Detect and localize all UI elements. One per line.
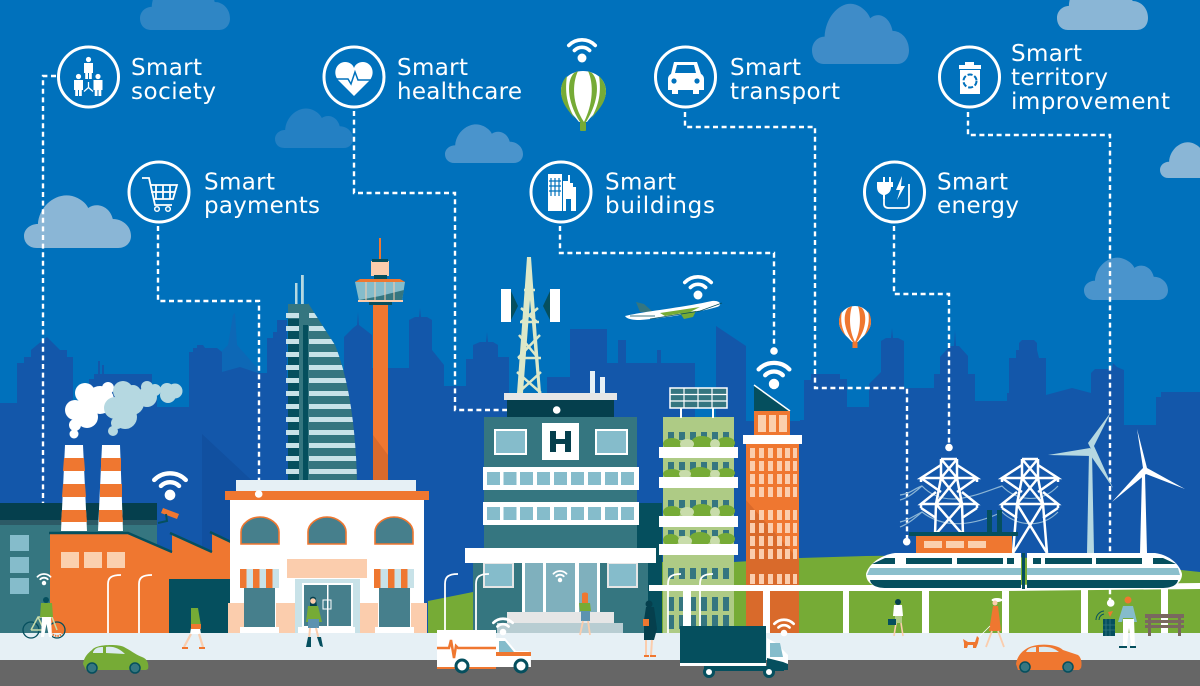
smart trash bin [1096,611,1115,636]
smart buildings item [531,162,715,222]
security camera [158,508,179,523]
panel: smart territory connector [968,112,1110,600]
panel: smart energy connector [894,226,953,451]
elevated rail viaduct [649,583,1200,633]
heading: smart energy: Smart [937,170,1008,196]
entrance [522,563,600,613]
person: bearded man [1118,596,1137,648]
icon: shopping cart [129,162,189,222]
heading: smart transport: transport [730,79,840,105]
panel: smart buildings connector [560,226,778,355]
window row 2 [483,502,639,525]
city skyline silhouette [0,308,1200,640]
delivery truck [680,626,788,676]
icon: recycling bin [940,47,1000,107]
heading: smart society: society [131,79,216,105]
icon: people network [58,47,118,107]
icon: car [656,47,716,107]
connector dots [255,406,1114,607]
faint distant building [213,313,259,392]
park bench [1145,614,1184,636]
white smoke [65,382,114,438]
street lamps [108,574,713,633]
right awning [374,569,414,588]
orange factory hall [50,532,231,633]
factory side windows [10,535,29,594]
panel: hospital [465,371,662,633]
pale bushes [678,439,720,546]
heading: smart healthcare: healthcare [397,79,522,105]
heading: smart territory improvement: territory [1011,65,1108,91]
sidewalk [0,633,1200,660]
factory windows [61,552,125,568]
person: woman on phone [643,600,657,657]
smart transport item [656,47,840,107]
shop windows [244,587,410,627]
pylon 2 [1002,459,1058,553]
icon: wifi on balloon [569,40,595,62]
tower roof [754,386,790,411]
heading: smart buildings: buildings [605,193,715,219]
smart energy item [864,162,1019,222]
shop sign [287,559,367,578]
balconies [659,447,738,555]
ground floor windows [484,563,637,587]
smart territory improvement item [940,41,1170,115]
power lines [900,486,1058,527]
H sign [542,423,579,460]
wind turbine 1 [1048,412,1113,553]
heading: smart payments: Smart [204,170,275,196]
smart healthcare item [324,47,522,107]
icon: wifi on airplane [685,277,711,299]
skyline shadow building [202,434,262,640]
icon: buildings [531,162,591,222]
power pylons [900,459,1058,553]
person: woman with briefcase [888,599,903,636]
panel: train [866,553,1182,589]
green hills [428,555,1200,640]
icon: orange hot-air balloon [839,306,871,348]
green car [83,645,148,673]
dog [963,636,979,648]
chimney 2 [98,445,123,531]
icon: green hot-air balloon [561,71,606,131]
person: woman on steps [579,592,591,635]
panel: retail shop building [225,480,429,633]
icon: wifi above orange tower [759,363,789,389]
blue smoke [104,381,182,436]
windows [668,432,729,629]
icon: wifi at hospital door [553,571,567,582]
heading: smart buildings: Smart [605,170,676,196]
panel: smart payments connector [158,226,259,492]
telecom tower [501,257,560,393]
clouds [24,0,1200,300]
icon: wifi on ambulance [493,619,513,635]
entrance door [295,579,360,633]
panel: orange observation tower [355,238,405,480]
panel: orange tower with wifi [743,385,802,633]
panel: green building [659,388,738,633]
steps [497,612,623,633]
panel: smart healthcare connector [354,111,555,410]
upper windows [495,430,627,454]
canopy [465,548,656,563]
panel: smart society connector [39,76,56,571]
icon: airplane [625,301,722,320]
icon: wifi on truck [774,620,794,636]
road [0,660,1200,686]
pylon 1 [921,459,977,535]
chimney 1 [61,445,87,531]
peach base [228,603,427,633]
wind turbine 2 [1112,429,1185,553]
heading: smart transport: Smart [730,55,801,81]
ambulance [437,630,531,672]
terrace bushes [663,436,735,546]
panel: factory [0,381,231,635]
substation [909,510,1018,554]
heading: smart healthcare: Smart [397,55,468,81]
icon: heart with pulse [324,47,384,107]
icon: plug and lightning [864,162,924,222]
person: cyclist with bike [23,597,65,638]
icon: wifi above cyclist [37,574,51,585]
solar panel [670,388,727,418]
heading: smart territory improvement: improvement [1011,89,1170,115]
heading: smart territory improvement: Smart [1011,41,1082,67]
smart payments item [129,162,320,222]
heading: smart energy: energy [937,193,1019,219]
tower windows [750,448,797,584]
heading: smart payments: payments [204,193,320,219]
antenna panels [501,289,560,322]
left awning [240,569,279,588]
panel: smart transport connector [685,112,907,539]
orange car [1016,645,1082,672]
person: woman walking dog [963,598,1004,648]
person: woman in skirt [306,597,323,647]
person: walking man [182,601,205,649]
arched windows [241,517,413,544]
heading: smart society: Smart [131,55,202,81]
panel: spire tower [286,275,359,480]
smart society item [58,47,216,107]
window row 1 [483,467,639,490]
icon: wifi above camera [154,473,186,500]
